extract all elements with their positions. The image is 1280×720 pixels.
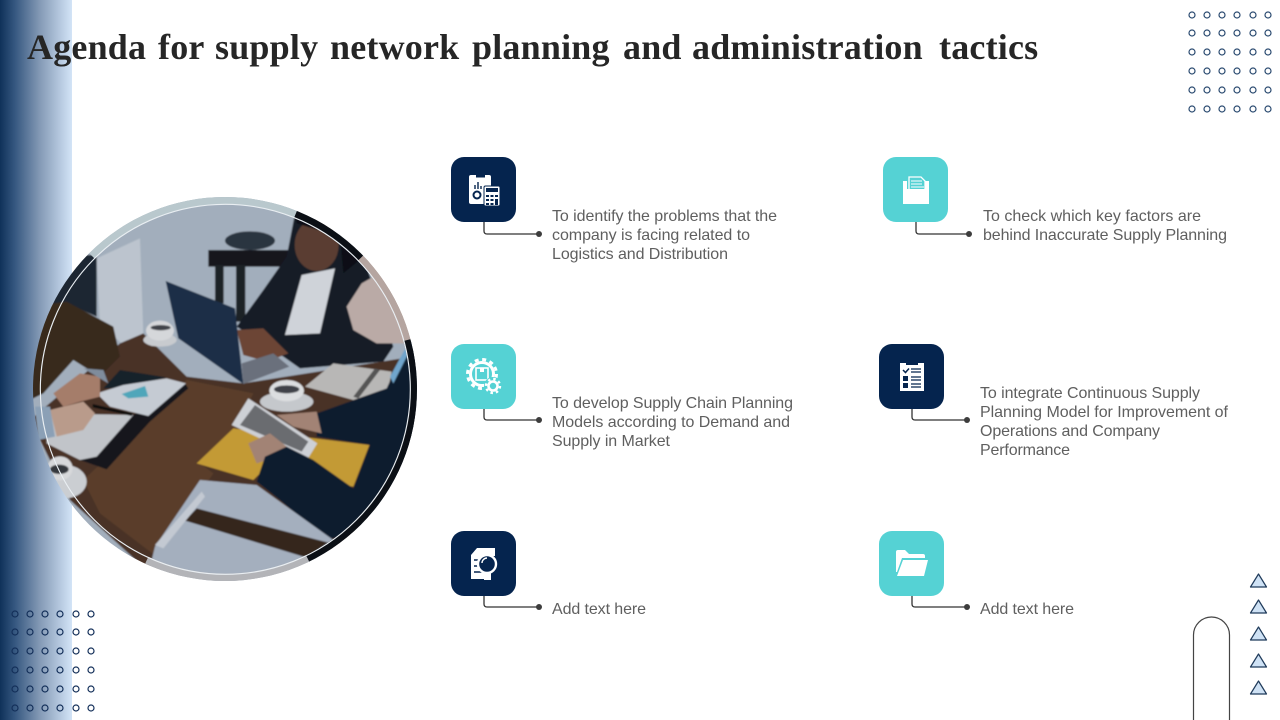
ring segments	[92, 200, 296, 256]
connector 5	[912, 409, 967, 420]
connector 2	[484, 409, 539, 420]
icon: open folder	[896, 550, 928, 576]
notebook	[305, 363, 392, 400]
icon tile 3	[451, 531, 516, 596]
icon: checklist	[900, 362, 924, 391]
title: administration	[692, 27, 923, 67]
icon: report and calculator	[469, 175, 500, 206]
dot 4	[966, 231, 972, 237]
title: tactics	[939, 27, 1038, 67]
second coffee cup	[260, 392, 313, 412]
text 2: Models according to Demand and	[552, 414, 790, 431]
connector 3	[484, 596, 539, 607]
icon tile 2	[451, 344, 516, 409]
icon tile 6	[879, 531, 944, 596]
text 2: To develop Supply Chain Planning	[552, 395, 793, 412]
text 5: Performance	[980, 442, 1070, 459]
text 5: Planning Model for Improvement of	[980, 404, 1229, 421]
left gradient band	[0, 0, 72, 720]
third coffee cup	[56, 465, 88, 499]
dot 6	[964, 604, 970, 610]
title: for	[158, 27, 205, 67]
title: Agenda	[27, 27, 146, 67]
first coffee cup	[143, 333, 177, 347]
agenda item 1	[451, 157, 777, 263]
text 3: Add text here	[552, 601, 646, 618]
left sleeve	[30, 302, 120, 400]
icon tile 4	[883, 157, 948, 222]
pill outline	[1194, 617, 1230, 720]
agenda item 5	[879, 344, 1229, 459]
yellow folder	[197, 428, 369, 487]
icon: gears with box	[468, 360, 502, 395]
text 6: Add text here	[980, 601, 1074, 618]
text 2: Supply in Market	[552, 433, 671, 450]
woman two face	[346, 278, 404, 345]
phone table	[208, 250, 288, 267]
icon tile 1	[451, 157, 516, 222]
agenda item 4	[883, 157, 1227, 244]
icon: document with magnifier	[471, 548, 496, 580]
agenda item 3	[451, 531, 646, 618]
dot 5	[964, 417, 970, 423]
title: network	[330, 27, 459, 67]
dot 2	[536, 417, 542, 423]
agenda item 6	[879, 531, 1074, 618]
text 1: company is facing related to	[552, 227, 750, 244]
text 5: Operations and Company	[980, 423, 1160, 440]
text 4: behind Inaccurate Supply Planning	[983, 227, 1227, 244]
dot 3	[536, 604, 542, 610]
triangle column	[1250, 574, 1266, 694]
text 1: To identify the problems that the	[552, 208, 777, 225]
connector 4	[916, 222, 969, 234]
title: and	[623, 27, 682, 67]
icon: file folder	[903, 177, 929, 204]
connector 1	[484, 222, 539, 234]
text 5: To integrate Continuous Supply	[980, 385, 1200, 402]
woman two body	[317, 337, 417, 538]
text 4: To check which key factors are	[983, 208, 1201, 225]
clipboard	[150, 480, 333, 580]
tablet	[232, 398, 317, 461]
connector 6	[912, 596, 967, 607]
dot 1	[536, 231, 542, 237]
title: supply	[215, 27, 318, 67]
woman one	[237, 213, 393, 368]
papers left	[80, 383, 188, 469]
title: planning	[472, 27, 610, 67]
dot grid: top right	[1189, 12, 1271, 112]
hands	[53, 373, 100, 407]
icon tile 5	[879, 344, 944, 409]
agenda item 2	[451, 344, 793, 450]
circular meeting photo	[30, 193, 423, 587]
text 1: Logistics and Distribution	[552, 246, 728, 263]
dot grid: bottom left	[12, 611, 94, 711]
laptop	[166, 281, 243, 384]
